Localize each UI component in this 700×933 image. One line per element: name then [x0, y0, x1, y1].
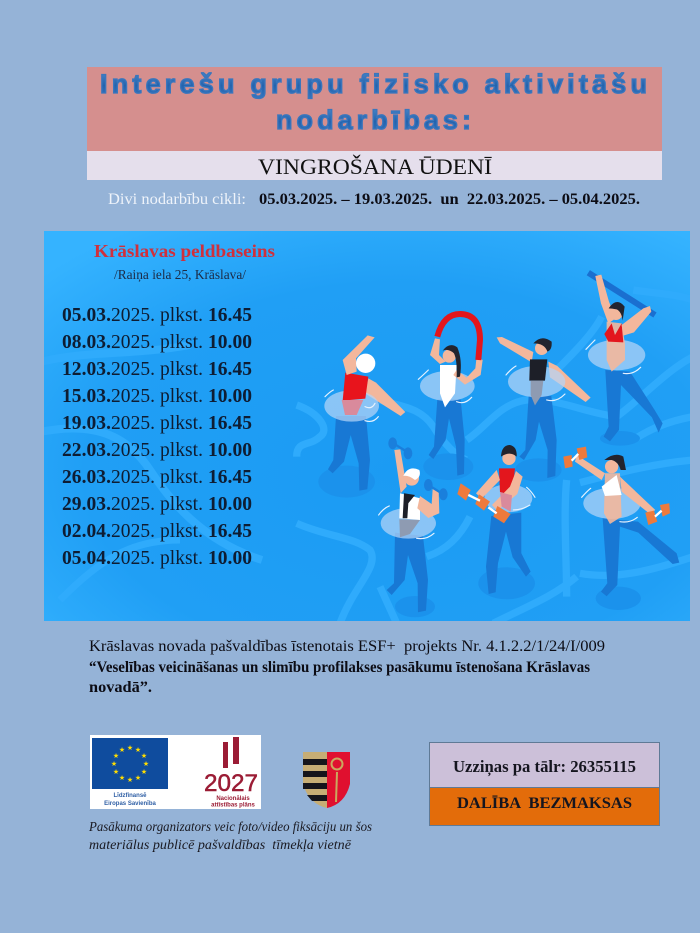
title text: Interešu grupu fizisko aktivitāšu	[100, 69, 647, 99]
EU co-funding caption: Eiropas Savienība	[104, 801, 156, 807]
title text	[100, 69, 647, 135]
title panel	[87, 67, 662, 151]
title text: nodarbības:	[276, 105, 471, 135]
logo: national development plan 2027: Nacionālais	[216, 796, 250, 802]
venue heading: Krāslavas peldbaseins	[94, 241, 275, 261]
funding logos	[90, 735, 261, 809]
contact box	[430, 742, 660, 788]
icon: EU flag: ★	[113, 768, 119, 776]
swimmer: white hair, red top	[318, 335, 405, 498]
schedule list: 26.03.2025. plkst. 16.45	[62, 467, 252, 488]
pool illustration panel	[40, 231, 693, 623]
schedule list: 22.03.2025. plkst. 10.00	[62, 440, 252, 461]
swimmer: black swimsuit	[497, 337, 591, 482]
icon: EU flag	[92, 738, 168, 789]
schedule list: 05.03.2025. plkst. 16.45	[62, 305, 252, 326]
swimmer: white top, blue dumbbells	[379, 437, 448, 617]
logo: national development plan 2027	[204, 737, 258, 808]
subtitle bar	[87, 151, 662, 180]
icon: EU flag: ★	[143, 760, 149, 768]
schedule list: 19.03.2025. plkst. 16.45	[62, 413, 252, 434]
schedule list	[62, 305, 252, 569]
subtitle bar: VINGROŠANA ŪDENĪ	[258, 154, 493, 179]
swimmers	[318, 273, 679, 617]
EU co-funding caption: Līdzfinansē	[113, 793, 147, 799]
photo notice	[88, 819, 372, 852]
swimmer: white bikini, orange dumbbells	[563, 447, 679, 610]
icon: EU flag: ★	[135, 746, 141, 754]
project description: novadā”.	[89, 679, 152, 696]
swimmer: red pool noodle	[418, 314, 483, 480]
logo: national development plan 2027: attīstības plāns	[211, 802, 255, 808]
schedule list: 05.04.2025. plkst. 10.00	[62, 548, 252, 569]
icon: EU flag: ★	[135, 774, 141, 782]
poster	[44, 67, 690, 852]
free participation box	[430, 788, 660, 826]
activity cycles line: Divi nodarbību cikli:	[108, 191, 246, 208]
swimmer: red top, orange dumbbells	[457, 445, 535, 599]
schedule list: 15.03.2025. plkst. 10.00	[62, 386, 252, 407]
water waves	[40, 290, 693, 623]
venue address: /Raiņa iela 25, Krāslava/	[114, 267, 246, 282]
icon: EU flag: ★	[111, 760, 117, 768]
icon: EU flag: ★	[127, 744, 133, 752]
icon: EU flag: ★	[119, 746, 125, 754]
schedule list: 29.03.2025. plkst. 10.00	[62, 494, 252, 515]
free participation box: DALĪBA BEZMAKSAS	[457, 794, 632, 812]
contact box: Uzziņas pa tālr: 26355115	[453, 757, 636, 777]
schedule list: 12.03.2025. plkst. 16.45	[62, 359, 252, 380]
icon: EU flag: ★	[113, 752, 119, 760]
project description	[89, 638, 605, 696]
icon: EU flag: ★	[141, 752, 147, 760]
icon: Krāslava coat of arms	[303, 752, 350, 808]
activity cycles line	[108, 191, 640, 208]
logo: national development plan 2027: 2027	[204, 770, 258, 797]
icon: EU flag: ★	[141, 768, 147, 776]
icon: EU flag: ★	[119, 774, 125, 782]
schedule list: 02.04.2025. plkst. 16.45	[62, 521, 252, 542]
project description: Krāslavas novada pašvaldības īstenotais ESF+ projekts Nr. 4.1.2.2/1/24/I/009	[89, 638, 605, 655]
project description: “Veselības veicināšanas un slimību profilakses pasākumu īstenošana Krāslavas	[89, 659, 590, 676]
photo notice: materiālus publicē pašvaldības tīmekļa vietnē	[89, 837, 352, 852]
EU co-funding caption	[104, 793, 156, 807]
icon: EU flag: ★	[127, 776, 133, 784]
photo notice: Pasākuma organizators veic foto/video fiksāciju un šos	[88, 819, 372, 834]
activity cycles line: 05.03.2025. – 19.03.2025. un 22.03.2025. – 05.04.2025.	[259, 191, 640, 208]
schedule list: 08.03.2025. plkst. 10.00	[62, 332, 252, 353]
swimmer: blue pool noodle	[586, 273, 663, 446]
